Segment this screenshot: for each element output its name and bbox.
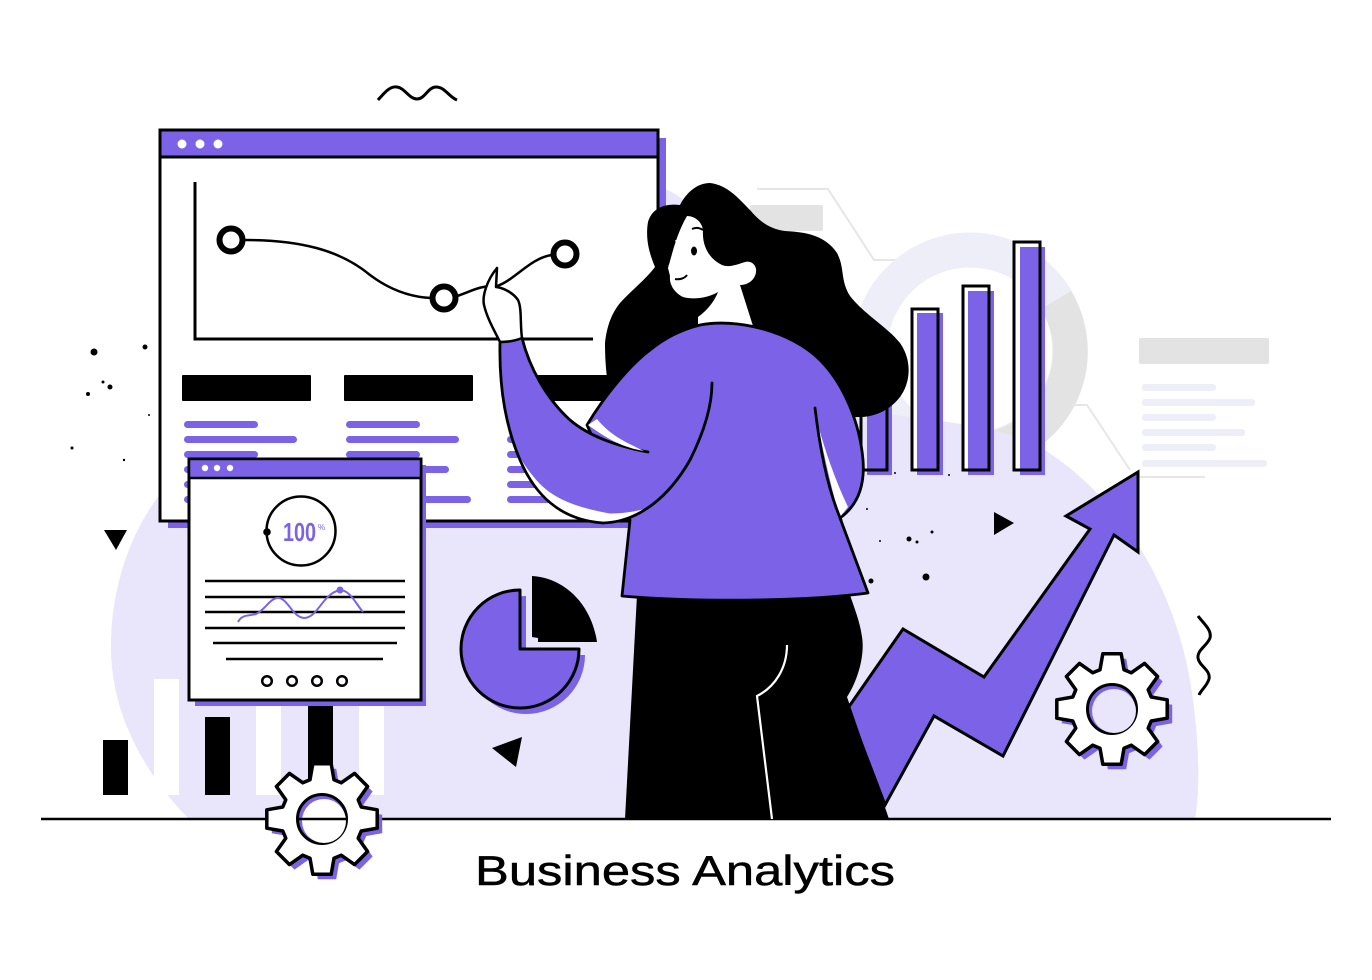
pagination circles [262, 676, 347, 686]
black heading bars [182, 375, 610, 401]
gear right hole [1088, 684, 1136, 734]
pie chart [461, 576, 597, 714]
right side highlight [818, 425, 848, 517]
sleeve underlay [500, 338, 712, 523]
window dots [178, 140, 222, 148]
purple and outlined bar chart [861, 242, 1045, 475]
eyebrow [692, 228, 703, 230]
progress ring knob [263, 528, 271, 536]
bar 4 [1014, 242, 1045, 475]
sleeve outlines [500, 338, 712, 523]
triangle center [492, 737, 522, 767]
gear right shadow [1062, 659, 1172, 769]
gear right [1057, 654, 1172, 769]
bar 3 [963, 286, 994, 475]
report shadow [195, 465, 426, 706]
eye [691, 246, 697, 256]
pants seam [757, 645, 787, 819]
squiggle right [1198, 616, 1210, 695]
window title bar [160, 130, 658, 157]
gear left shadow [272, 769, 382, 879]
bar 1 [861, 355, 892, 475]
faded connector line bottom [1072, 405, 1205, 477]
faded connector line top [757, 189, 912, 260]
report title bar [189, 459, 421, 478]
pie main slice [461, 590, 579, 708]
hand [484, 268, 522, 342]
report dots [202, 465, 233, 471]
gear left hole inner [302, 799, 346, 843]
triangle right [994, 512, 1014, 535]
pants [625, 595, 889, 819]
hair strand on cheek [669, 240, 677, 266]
faded gray background graphics [750, 189, 1269, 477]
sleeve fill [500, 338, 712, 513]
pie separated slice [532, 576, 597, 642]
progress ring [266, 496, 336, 566]
line chart curve [245, 240, 552, 298]
chart point 1 [220, 228, 242, 252]
gear left [267, 764, 382, 879]
gear left hole [298, 794, 346, 844]
gear right hole inner [1092, 689, 1136, 733]
main browser window [160, 130, 666, 528]
squiggle top [378, 87, 457, 100]
white bar chart bars at bottom left [154, 679, 384, 795]
chart point 2 [432, 286, 456, 310]
gear right body [1057, 654, 1167, 764]
small report window [189, 459, 426, 706]
faded title block [750, 205, 823, 231]
faded donut chart [870, 250, 1070, 450]
chart point 3 [554, 242, 576, 266]
wave marker [336, 586, 344, 594]
chart axes [195, 182, 593, 339]
black bar chart bars at bottom left [103, 706, 333, 795]
pie shadow [467, 596, 585, 714]
gear left ground line [298, 818, 346, 820]
growth arrow [848, 472, 1138, 805]
face and neck [668, 216, 756, 326]
right side fold line [815, 408, 841, 520]
sweater torso [587, 323, 868, 600]
report body [189, 459, 421, 700]
faded legend block [1139, 338, 1269, 467]
scattered dots right [866, 472, 950, 584]
report text lines [205, 581, 405, 659]
purple text lines [184, 421, 567, 503]
hair [605, 183, 909, 420]
armpit highlight [588, 419, 644, 451]
gear left body [267, 764, 377, 874]
smile [675, 275, 687, 279]
mini wave chart [238, 590, 363, 622]
percent sign: % [318, 523, 325, 532]
woman [484, 183, 909, 819]
scattered dots left [70, 344, 150, 461]
lavender background blob [111, 187, 1198, 820]
ground line [41, 818, 1331, 820]
window shadow [168, 138, 666, 528]
title: Business Analytics [475, 847, 895, 894]
window body [160, 130, 658, 521]
bar 2 [912, 309, 943, 475]
progress value: 100 [283, 517, 316, 547]
triangle left [104, 530, 127, 550]
